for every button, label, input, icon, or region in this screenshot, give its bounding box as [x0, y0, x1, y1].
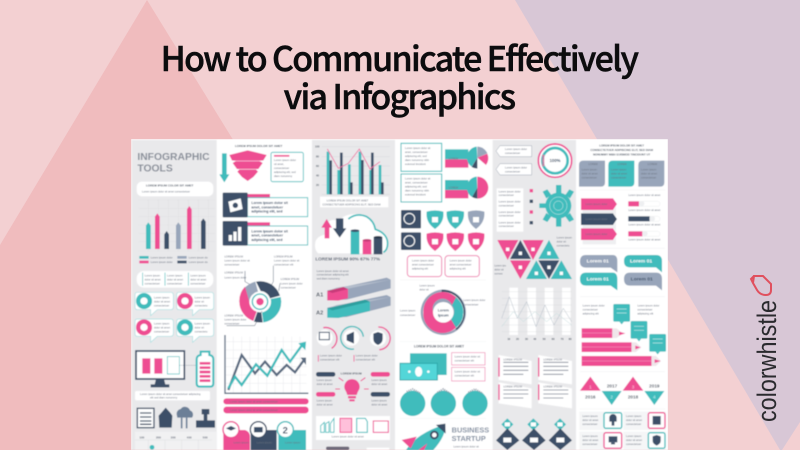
panel: column 1: Lorem ipsum dolor sit amet consectetuer — [142, 189, 190, 193]
panel: column 6: dolor sit amet — [641, 171, 657, 175]
panel: column 3: LOREM IPSUM 90% 67% 77% — [315, 257, 381, 262]
timeline: triangles and years: 2018 — [628, 394, 639, 399]
chart: bar and line chart: 80 — [316, 155, 319, 159]
panel: column 2: amet, consectetuer — [251, 234, 284, 238]
panel: column 4: amet consectetuer — [450, 262, 472, 266]
chart: grey line chart: 40 — [533, 337, 537, 341]
cards: four skewed notes: LOREM IPSUM — [503, 385, 522, 389]
panel: column 4: adipiscing elit, sed — [405, 154, 427, 158]
panel: column 5: Lorem ips — [494, 264, 507, 268]
icon boxes: consectetuer — [626, 442, 641, 446]
illustration: cloud with bars — [315, 214, 388, 254]
panel: column 4: LOREM — [449, 186, 458, 190]
panel: column 4: consectetuer elit — [455, 359, 474, 363]
panel: column 3: Lorem ipsum — [317, 399, 333, 403]
background: dark pink triangle — [0, 0, 424, 450]
pencil bars with callouts — [582, 304, 666, 366]
panel: column 3: Lorem ipsum — [317, 378, 333, 382]
panel: column 1: dolor sit amet — [154, 299, 170, 303]
cards: four skewed notes — [499, 355, 572, 408]
panel: column 6: CONSECTETUER ADIPISCING ELIT, SED DIAM — [590, 148, 654, 152]
tags: progress labels: Lorem ipsum dolor — [585, 217, 607, 221]
panel: column 4: Lorem ipsum dolor sit — [453, 444, 479, 448]
panel: column 1: consectetuer — [190, 281, 206, 285]
panel: column 5: consectetu — [557, 243, 570, 247]
icon boxes: dolor sit amet — [626, 418, 642, 422]
panel: column 1: Lorem ipsum dolor — [151, 260, 173, 264]
panel: column 4: Lorem ipsum dolor sit — [405, 146, 431, 150]
panel: column 4: LOREM IPSUM DOLOR SIT AMET — [414, 344, 464, 348]
panel: column 3: consectetuer adipiscing elit — [317, 273, 349, 277]
chart: donut with label: Lorem — [438, 309, 450, 313]
panel: column 1: Lorem ipsum dolor sit amet consectetuer adipiscing — [140, 392, 201, 396]
panel: column 6: adipiscing elit — [637, 311, 654, 315]
chart: 100 percent ring: 100% — [549, 158, 561, 163]
panel: column 2: LOREM IPSUM — [224, 270, 243, 274]
panel: column 2: 2 — [283, 425, 288, 435]
icon boxes: Lorem ipsum — [626, 434, 642, 438]
panel: column 5: Lorem ipsum dolor — [499, 220, 521, 224]
panel: column 2: Lorem ipsum dolor sit amet consectetuer — [230, 408, 278, 412]
panel: column 2: Lorem ipsum dolor sit — [224, 259, 250, 263]
panel: column 2: Lorem ipsum dolor sit — [251, 229, 289, 233]
chart: grey line chart: 20 — [516, 337, 519, 341]
chart: bar and line chart: 60 — [316, 164, 319, 168]
panel: column 4: consectetuer elit — [455, 374, 474, 378]
panel: column 2: Lorem ipsum dolor — [224, 318, 246, 322]
panel: column 5: consectetuer — [499, 193, 514, 197]
panel: column 5: consectetuer — [505, 151, 520, 155]
panel: column 5 — [493, 140, 576, 450]
cards: four skewed notes: LOREM IPSUM — [503, 357, 522, 361]
panel: column 1: dolor sit amet — [154, 326, 170, 330]
icon boxes: consectetuer — [582, 442, 598, 446]
chart: bar and line chart: 100 — [315, 145, 320, 149]
panel: column 1: Lorem ipsum — [154, 295, 170, 299]
icon boxes: Lorem ipsum — [582, 414, 598, 418]
panel: column 3: dolor sit amet — [317, 403, 333, 407]
panel: column 3: Lorem ipsum dolor — [320, 354, 342, 358]
panel: column 4: Lorem ipsum dolor — [463, 298, 485, 302]
panel: column 5: dolor sit — [557, 239, 566, 243]
panel: column 4: amet consectetuer — [412, 262, 434, 266]
icon boxes: consectetuer — [582, 422, 598, 426]
panel: column 4 — [400, 143, 489, 450]
chart: bar and line chart: 40 — [316, 174, 319, 178]
chart: 100 percent ring — [538, 144, 572, 177]
timeline: triangles and years: 4 — [653, 394, 656, 399]
panel: column 1: dolor sit amet — [190, 277, 207, 281]
icons: safes and shields — [401, 210, 484, 251]
panel: column 4: BUSINESS — [452, 425, 489, 434]
panel: column 2: consectetuer elit — [274, 263, 294, 267]
chart: grey line chart: 30 — [525, 337, 528, 341]
panel: column 4: Lorem ipsum dolor — [412, 258, 434, 262]
panel: column 2: diam nonummy — [274, 174, 293, 178]
panel: column 3: dolor sit amet — [317, 382, 333, 386]
panel: column 4: amet, consectetuer — [405, 150, 428, 154]
panel: column 6: consectetuer — [637, 307, 653, 311]
panel: column 3: dolor sit amet — [371, 382, 388, 386]
panel: column 6: consectetuer — [583, 307, 598, 311]
diagram: triangle mosaic — [497, 240, 572, 279]
panel: column 2: adipiscing elit, sed — [251, 210, 283, 214]
panel: column 1: dolor sit amet — [167, 277, 183, 281]
panel: column 1: Lorem ipsum — [190, 273, 206, 277]
title: How to Communicate Effectively — [161, 32, 637, 81]
panel: column 4: consectetuer — [463, 303, 479, 307]
panel: column 1 — [132, 140, 217, 450]
icons: diamond badges — [496, 418, 572, 450]
panel: column 2: Lorem ipsum — [233, 440, 249, 444]
icon: money notes — [400, 353, 447, 380]
tags: progress labels: Lorem ipsum dolor — [585, 232, 607, 236]
cards: four skewed notes: LOREM IPSUM — [543, 385, 562, 389]
chart: pie one — [467, 147, 488, 169]
panel: column 4: Lorem ipsum dolor — [450, 258, 472, 262]
panel: column 1: 500 — [203, 435, 208, 439]
icon: light bulb — [335, 378, 369, 401]
panel: column 2: consectetuer — [274, 166, 289, 170]
panel: column 3: LOREM IPSUM — [341, 372, 362, 376]
panel: column 4: Lorem ipsum — [400, 309, 416, 313]
panel: column 1: Lorem ipsum do — [189, 255, 208, 259]
panel: column 1: 100 — [139, 435, 145, 439]
panel: column 3: dolor sit amet — [371, 403, 388, 407]
timeline: triangles and years: 3 — [632, 384, 635, 389]
panel: column 4: euismod tincidunt — [405, 162, 426, 166]
panel: column 6: Lorem ipsum dolor sit amet — [628, 237, 661, 241]
panel: column 4: amet, consectetuer — [405, 181, 428, 185]
panel: column 1: Lorem ipsum — [195, 295, 211, 299]
panel: column 2: Lorem ipsum dolor — [224, 275, 246, 279]
panel: column 2: Lorem ipsum dolor — [281, 281, 303, 285]
panel: column 6: LOREM — [617, 162, 627, 166]
title: via Infographics — [284, 70, 514, 119]
panel: column 2: Lorem ipsum dolor sit — [274, 259, 300, 263]
tags: progress labels: Lorem ipsum dolor — [585, 202, 607, 206]
chart: grey line chart: 60 — [552, 337, 555, 341]
chart: bar and line chart: 20 — [316, 183, 319, 187]
panel: column 1: dolor sit — [195, 326, 204, 330]
icon boxes: dolor sit amet — [582, 418, 599, 422]
collage columns four to six — [400, 140, 666, 450]
panel: column 5: Lorem ipsum — [557, 235, 573, 239]
panel: column 2: LOREM IPSUM — [224, 314, 243, 318]
panel: column 2: Lorem ipsum dolor sit — [251, 201, 289, 205]
panel: column 1: 200 — [156, 435, 161, 439]
panel: column 4: Lorem ipsum dolor sit — [405, 177, 431, 181]
panel: column 2: Lorem ipsum dolor — [274, 158, 296, 162]
chart: grey line chart: 50 — [543, 337, 546, 341]
speech bubbles: Lorem 01 — [587, 259, 609, 265]
panel: column 2: LOREM IPSUM — [281, 277, 299, 281]
panel: column 6: Lorem ipsum dolor — [583, 303, 605, 307]
title — [161, 32, 639, 119]
panel: column 1: Lorem ipsum — [154, 322, 170, 326]
panel: column 6: Lorem ipsum — [641, 167, 657, 171]
panel: column 1: dolor sit — [195, 299, 204, 303]
panel: column 2: LOREM IPSUM — [224, 255, 243, 259]
panel: column 5: consectetuer — [505, 169, 520, 173]
icon boxes — [579, 412, 666, 450]
panel: column 2: consectetuer — [281, 285, 296, 289]
panel: column 3: LOREM IPSUM DOLOR SIT AMET — [327, 198, 369, 202]
chart: grey line chart: 70 — [561, 337, 564, 341]
panel: column 4: consectetuer — [400, 313, 415, 317]
panel: column 1: consectetuer — [154, 303, 169, 307]
panel: column 2: Lorem ipsum dolor sit amet consectetuer — [230, 399, 278, 403]
panel: column 1: consectetuer — [167, 281, 182, 285]
panel: column 2: consectetuer — [224, 322, 240, 326]
panel: column 6: adipiscing elit — [583, 311, 599, 315]
panel: column 5: consectetuer — [499, 224, 514, 228]
chart: 3D bars: A2 — [316, 310, 323, 316]
panel: column 6: LOREM — [588, 162, 598, 166]
timeline: triangles and years: 2017 — [607, 383, 618, 388]
chart: grey line chart — [502, 288, 572, 341]
panel: column 5: Lorem ipsum dolor — [499, 200, 521, 204]
panel: column 2: amet, consectetuer — [251, 205, 284, 209]
panel: column 4: adipiscing elit — [412, 266, 428, 270]
panel: column 4: Lorem ipsum dolor sit — [455, 369, 480, 373]
panel: column 6: NONUMMY NIBH EUISMOD TINCIDUNT UT — [593, 153, 651, 157]
icon boxes: Lorem ipsum — [626, 414, 642, 418]
panel: column 4: adipiscing elit, sed — [405, 185, 427, 189]
timeline: triangles and years: 2 — [610, 394, 613, 399]
speech bubbles — [580, 255, 662, 290]
logo: colorwhistle wordmark: colorwhistle — [752, 300, 782, 422]
panel: column 6: Lorem ipsum dolor sit amet — [628, 193, 661, 197]
panel: column 6: Lorem ipsum — [611, 167, 627, 171]
panel: column 1: consectetuer — [154, 330, 169, 334]
panel: column 6: Lorem ipsum dolor — [637, 303, 659, 307]
speech bubbles: Lorem 01 — [630, 258, 652, 264]
panel: column 2: Lorem ipsum — [285, 440, 301, 444]
panel: column 2: sit amet, — [274, 162, 284, 166]
panel: column 6 — [579, 143, 666, 450]
icon boxes: consectetuer — [626, 422, 641, 426]
panel: column 2: Lorem ipsum — [257, 440, 273, 444]
panel: column 4: LOREM — [449, 156, 458, 160]
panel: column 2: adipiscing elit, sed — [274, 170, 296, 174]
background: purple region — [515, 0, 800, 450]
panel: column 4: adipiscing elit — [450, 266, 466, 270]
timeline: triangles and years: 2016 — [585, 394, 596, 399]
panel: column 1: TOOLS — [137, 164, 173, 175]
panel: column 3: Lorem ipsum — [371, 378, 387, 382]
panel: column 6: LOREM — [648, 162, 657, 166]
panel: column 1: Lorem ipsum — [195, 322, 211, 326]
panel: column 4: diam nonummy nibh — [405, 189, 429, 193]
panel: column 4: euismod tincidunt — [405, 193, 426, 197]
chart: donut with label — [421, 290, 466, 335]
panel: column 2: LOREM IPSUM DOLOR SIT AMET — [235, 144, 282, 148]
icons: three ring badges — [317, 326, 390, 350]
panel: column 1: consectetuer — [145, 281, 160, 285]
cards: four skewed notes: LOREM IPSUM — [543, 357, 562, 361]
panel: column 5: consectetuer — [499, 214, 514, 218]
chart: 3D bars: A1 — [316, 293, 323, 299]
panel: column 3: consectetuer elit — [356, 358, 375, 362]
panel: column 2: adipiscing elit, sed — [251, 238, 283, 242]
panel: column 2 — [219, 144, 309, 450]
panel: column 5: dolor sit — [494, 268, 504, 272]
tags: progress labels — [581, 198, 617, 244]
panel: column 1: LOREM IPSUM COLOR SIT AMET — [146, 184, 193, 188]
panel: column 3: Lorem ipsum dolor — [356, 354, 378, 358]
panel: column 3: sed diam nonummy — [317, 276, 341, 280]
speech bubbles: Lorem 01 — [631, 276, 653, 282]
icon: teal gear — [539, 185, 574, 227]
timeline: triangles and years: 2019 — [649, 383, 660, 388]
speech bubbles: Lorem 01 — [587, 276, 609, 282]
panel: column 4: Lorem ipsum — [419, 284, 435, 288]
panel: column 2: consectetuer — [224, 263, 240, 267]
panel: column 6: consectetuer — [582, 175, 597, 179]
collage columns one to three — [132, 140, 395, 450]
panel: column 1: Lorem ipsum dolor — [151, 255, 173, 259]
panel: column 4: diam nonummy nibh — [405, 158, 429, 162]
panel: column 3 — [312, 140, 395, 450]
panel: column 6: Lorem ipsum dolor sit amet — [628, 208, 661, 212]
icon boxes: Lorem ipsum — [582, 434, 598, 438]
panel: column 1: consectetu — [195, 330, 208, 334]
panel: column 6: dolor sit amet — [582, 171, 598, 175]
icon boxes: dolor sit amet — [582, 438, 599, 442]
panel: column 1: Lorem ipsum — [145, 273, 161, 277]
timeline: triangles and years: 1 — [589, 384, 592, 389]
panel: column 1: Lorem ipsum do — [189, 260, 208, 264]
chart: pie two — [467, 177, 488, 199]
chart: line chart with arrows — [225, 335, 308, 393]
infographic collage — [131, 139, 668, 450]
panel: column 3: consectetuer elit — [320, 358, 340, 362]
panel: column 3: Lorem ipsum dolor sit amet — [332, 434, 364, 438]
panel: column 5: Lorem ipsum dolor — [505, 147, 527, 151]
icon boxes: dolor sit amet — [626, 438, 642, 442]
chart: grey line chart: 80 — [569, 337, 572, 341]
panel: column 6: dolor sit amet — [611, 171, 627, 175]
icon: whistle logo mark — [751, 276, 771, 295]
panel: column 1: elit sed diam nonummy — [150, 396, 178, 400]
panel: column 6: Lorem ipsum dolor sit amet — [628, 223, 661, 227]
timeline: triangles and years — [580, 377, 664, 405]
panel: column 3: Lorem ipsum — [371, 399, 387, 403]
panel: column 5: consec — [494, 273, 503, 276]
panel: column 4: STARTUP — [452, 434, 486, 443]
panel: column 1: dolor sit amet — [145, 277, 161, 281]
chart: bar and line chart — [315, 145, 390, 194]
panel: column 3: CONSECTETUER ADIPISCING ELIT, SED DIAM — [322, 202, 381, 206]
panel: column 5: Lorem ipsum dolor — [499, 189, 521, 193]
panel: column 5: Lorem ipsum dolor — [505, 165, 527, 169]
panel: column 1: INFOGRAPHIC — [137, 152, 210, 163]
panel: column 6: Lorem ipsum — [582, 167, 598, 171]
panel: column 6: LOREM IPSUM DOLOR SIT AMET — [599, 143, 644, 147]
illustration: rocket — [402, 424, 446, 450]
icons: three teal circles — [400, 389, 488, 416]
panel: column 1: 300 — [171, 435, 176, 439]
panel: column 4: Lorem ipsum dolor sit — [455, 354, 480, 358]
panel: column 2: LOREM IPSUM — [274, 255, 293, 259]
panel: column 5: consectetuer — [499, 203, 514, 207]
panel: column 1: consectetu — [195, 303, 208, 307]
chart: donut with label: Ipsum — [438, 313, 449, 317]
panel: column 3: Lorem ipsum dolor sit amet — [317, 269, 349, 273]
panel: column 6: consectetuer — [641, 175, 656, 179]
panel: column 5: Lorem ipsum dolor — [499, 210, 521, 214]
chart: segmented donut — [239, 281, 281, 323]
panel: column 4: dolor sit — [419, 288, 429, 292]
panel: column 6: consectetuer — [611, 175, 626, 179]
panel: column 1: 400 — [187, 435, 192, 439]
panel: column 1: Lorem ipsum — [167, 273, 183, 277]
chart: 3D bars — [316, 278, 391, 318]
chart: grey line chart: 10 — [507, 337, 511, 341]
